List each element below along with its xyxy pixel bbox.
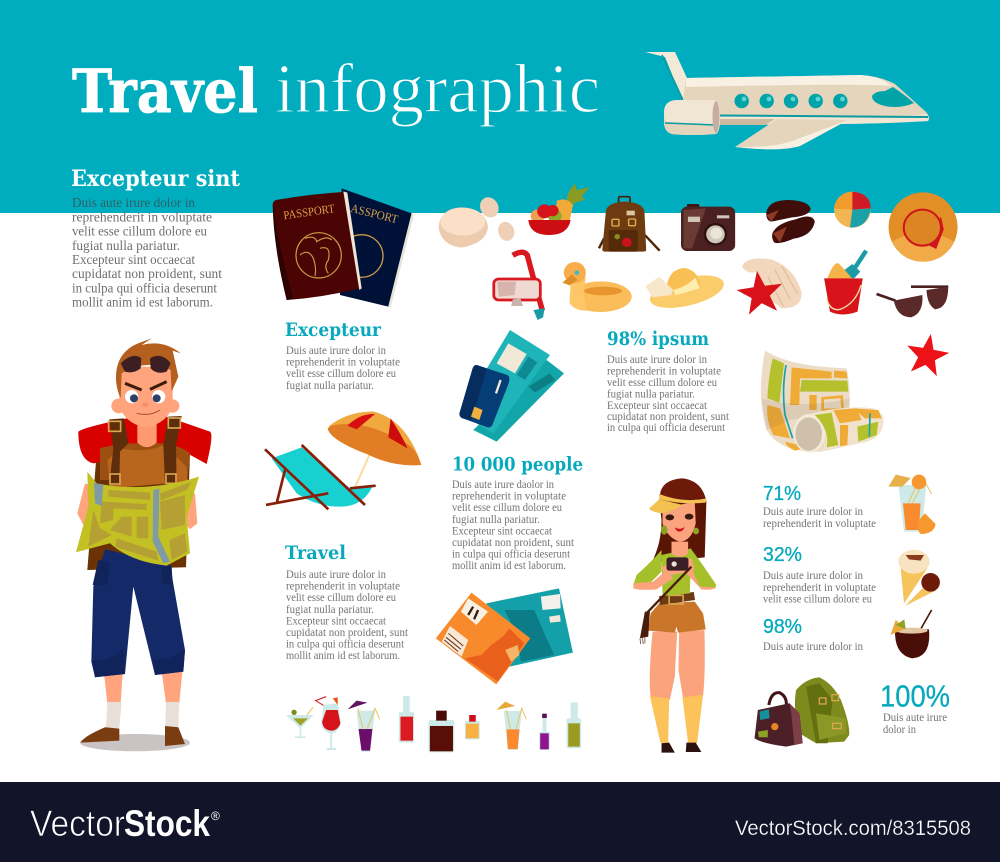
icon: seashell xyxy=(742,259,802,308)
icon: red cocktail xyxy=(316,697,341,749)
shorts xyxy=(648,602,706,633)
stat: 100%: 100% xyxy=(880,678,950,714)
stat: 32%: velit esse cillum dolore eu xyxy=(763,594,872,606)
icon: postcards xyxy=(436,588,573,684)
text block: intro: velit esse cillum dolore eu xyxy=(72,224,207,240)
section: 98% ipsum: Excepteur sint occaecat xyxy=(607,400,708,412)
visor cap xyxy=(649,478,706,513)
camera and hands xyxy=(662,557,695,577)
icon: slippers xyxy=(766,200,815,243)
icon: duck float xyxy=(562,262,632,312)
header band xyxy=(0,0,1000,213)
small illustrations right column xyxy=(755,475,940,747)
icon: soap stones xyxy=(439,194,516,248)
icon: sand bucket xyxy=(824,251,866,314)
icon: dark square bottle xyxy=(429,711,454,752)
map xyxy=(76,472,199,566)
icon: travel bags xyxy=(755,677,849,747)
stat: 98% xyxy=(763,616,863,653)
icon: green bottle xyxy=(567,702,581,748)
icon: sunglasses xyxy=(877,287,948,317)
top and arms xyxy=(633,542,716,596)
stat: 71%: reprehenderit in voluptate xyxy=(763,518,876,530)
icon: backpack xyxy=(599,197,660,252)
section: Travel: mollit anim id est laborum. xyxy=(286,650,400,662)
section: Excepteur xyxy=(285,319,400,392)
head xyxy=(111,338,181,447)
section: Excepteur: Excepteur xyxy=(285,319,382,341)
icon: orange juice xyxy=(888,475,936,534)
backpack and bedroll xyxy=(78,417,211,570)
stat: 98%: 98% xyxy=(763,616,802,638)
section: Travel xyxy=(285,542,409,662)
section: Excepteur: Duis aute irure dolor in xyxy=(286,345,386,357)
footer logo: Stock xyxy=(124,803,210,844)
trousers xyxy=(91,549,185,677)
section: Travel: reprehenderit in voluptate xyxy=(286,581,400,593)
icon: snorkel mask xyxy=(494,252,544,320)
icon: deck chair and parasol xyxy=(265,412,421,509)
stat: 32%: 32% xyxy=(763,544,802,566)
section: 98% ipsum: fugiat nulla pariatur. xyxy=(607,388,695,400)
icon: fruit bowl xyxy=(528,183,589,235)
section: 98% ipsum: cupidatat non proident, sunt xyxy=(607,411,730,423)
stat: 100%: Duis aute irure xyxy=(883,712,947,724)
section: Excepteur: velit esse cillum dolore eu xyxy=(286,368,396,380)
icon: red bottle xyxy=(399,696,414,743)
shoulder bag xyxy=(640,567,691,644)
title: Travel xyxy=(72,57,258,127)
icon: ice cream xyxy=(898,550,940,606)
section: Travel: Excepteur sint occaecat xyxy=(286,615,387,627)
section: 98% ipsum: velit esse cillum dolore eu xyxy=(607,377,717,389)
section: 98% ipsum: 98% ipsum xyxy=(607,328,709,350)
section: Travel: in culpa qui officia deserunt xyxy=(286,639,405,651)
text block: intro: fugiat nulla pariatur. xyxy=(72,239,180,254)
icon: passports xyxy=(273,188,414,307)
stat: 32%: Duis aute irure dolor in xyxy=(763,570,863,582)
text block: intro: Duis aute irure dolor in xyxy=(72,196,195,211)
icon: orange drink xyxy=(496,702,526,750)
socks and legs xyxy=(650,630,705,753)
beach icons row xyxy=(439,183,958,320)
t-shirt and straps xyxy=(107,416,187,488)
stat: 71% xyxy=(763,483,876,530)
icon: purple drink xyxy=(348,701,380,752)
windshield xyxy=(872,87,914,107)
section: 10 000 people: Excepteur sint occaecat xyxy=(452,525,553,537)
hands xyxy=(77,483,197,529)
heading: Excepteur sint: Excepteur sint xyxy=(71,166,241,192)
engine xyxy=(664,100,720,135)
section: 10 000 people: Duis aute irure daolor in xyxy=(452,479,554,491)
hair xyxy=(652,478,706,563)
stat: 32% xyxy=(763,544,876,606)
section: 10 000 people: in culpa qui officia deserunt xyxy=(452,549,571,561)
footer image id: VectorStock.com/8315508 xyxy=(735,817,971,840)
icon: purple bottle xyxy=(539,714,550,750)
section: Excepteur: reprehenderit in voluptate xyxy=(286,357,400,369)
icon: credit card and tickets xyxy=(459,330,564,442)
legs xyxy=(81,672,185,746)
ground shadow xyxy=(80,734,190,751)
section: Travel: fugiat nulla pariatur. xyxy=(286,604,374,616)
stat: 100%: dolor in xyxy=(883,724,916,736)
icon: sun hat xyxy=(646,268,727,314)
icon: beach ball xyxy=(834,192,871,228)
icon: straw hat top view xyxy=(889,192,958,262)
section: 10 000 people: mollit anim id est laborum. xyxy=(452,560,566,572)
footer logo xyxy=(30,803,220,844)
icon: small perfume bottle xyxy=(465,715,480,739)
belt xyxy=(659,592,695,605)
text block: intro: mollit anim id est laborum. xyxy=(72,296,213,310)
footer logo: Vector xyxy=(30,803,125,844)
icon: passports: ASSPORT xyxy=(349,201,400,226)
text block: intro: Excepteur sint occaecat xyxy=(72,253,195,268)
title: infographic xyxy=(275,51,600,128)
footer logo: ® xyxy=(211,809,220,823)
airplane illustration xyxy=(645,52,929,149)
section: Excepteur: fugiat nulla pariatur. xyxy=(286,380,374,392)
section: 10 000 people xyxy=(452,454,583,572)
character: tourist girl xyxy=(633,478,716,753)
icon: camera xyxy=(681,204,735,251)
text block: intro: in culpa qui officia deserunt xyxy=(72,282,217,296)
icon: red starfish xyxy=(734,268,786,316)
text block: intro: cupidatat non proident, sunt xyxy=(72,267,222,282)
stat: 32%: reprehenderit in voluptate xyxy=(763,582,876,594)
stat: 71%: 71% xyxy=(763,483,801,505)
icon: rolled map xyxy=(761,351,884,453)
section: Travel: Travel xyxy=(285,542,346,564)
section: 10 000 people: velit esse cillum dolore eu xyxy=(452,502,562,514)
section: 10 000 people: fugiat nulla pariatur. xyxy=(452,514,540,526)
stat: 98%: Duis aute irure dolor in xyxy=(763,641,863,653)
title xyxy=(72,51,600,128)
text block: intro xyxy=(72,196,222,310)
section: Travel: Duis aute irure dolor in xyxy=(286,569,386,581)
wing xyxy=(735,119,848,149)
icon: red star xyxy=(903,330,952,378)
stat: 71%: Duis aute irure dolor in xyxy=(763,506,863,518)
section: 98% ipsum: in culpa qui officia deserunt xyxy=(607,422,726,434)
character: backpacker boy xyxy=(76,338,211,751)
stat: 100% xyxy=(880,678,950,736)
section: 10 000 people: reprehenderit in voluptate xyxy=(452,491,566,503)
face xyxy=(661,502,699,542)
windows xyxy=(734,94,848,108)
section: 10 000 people: cupidatat non proident, sunt xyxy=(452,537,575,549)
globe xyxy=(296,233,341,278)
drinks row xyxy=(286,696,581,752)
section: Travel: cupidatat non proident, sunt xyxy=(286,627,409,639)
section: 10 000 people: 10 000 people xyxy=(452,454,583,476)
section: Travel: velit esse cillum dolore eu xyxy=(286,592,396,604)
section: 98% ipsum: Duis aute irure dolor in xyxy=(607,354,707,366)
icon: martini xyxy=(286,707,314,737)
icon: passports: PASSPORT xyxy=(282,201,336,222)
icon: coconut drink xyxy=(890,610,932,658)
section: 98% ipsum xyxy=(607,328,730,434)
text block: intro: reprehenderit in voluptate xyxy=(72,210,212,226)
section: 98% ipsum: reprehenderit in voluptate xyxy=(607,366,721,378)
footer bar xyxy=(0,782,1000,862)
